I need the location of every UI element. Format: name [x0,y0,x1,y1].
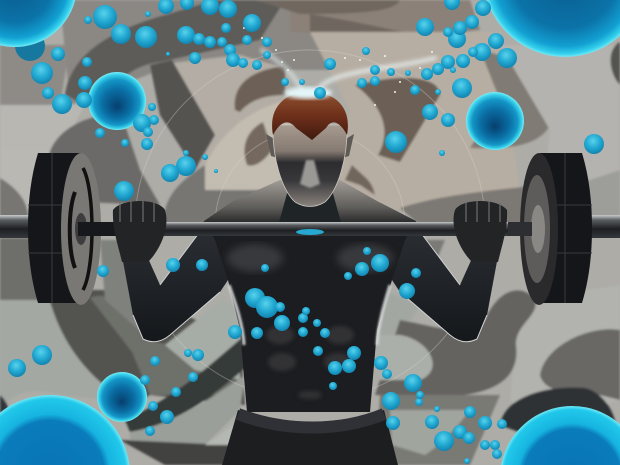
man: torso [202,180,418,412]
man: right arm [380,225,498,342]
water spray from head [243,27,435,106]
ears [266,134,354,158]
thin concentric lines [135,50,485,400]
man: left arm [122,225,240,342]
nose [300,160,320,188]
bar [0,222,620,236]
hands [113,201,507,262]
barbell [0,153,620,305]
chest [227,244,393,272]
left plates [28,153,118,305]
hair [272,92,348,140]
right plates [508,153,592,305]
man: shorts [222,410,398,465]
waist rim light [229,285,390,345]
abs [266,326,354,399]
man: head [266,87,354,206]
chest glow on bar [296,229,324,235]
neck and shoulders [202,180,418,226]
